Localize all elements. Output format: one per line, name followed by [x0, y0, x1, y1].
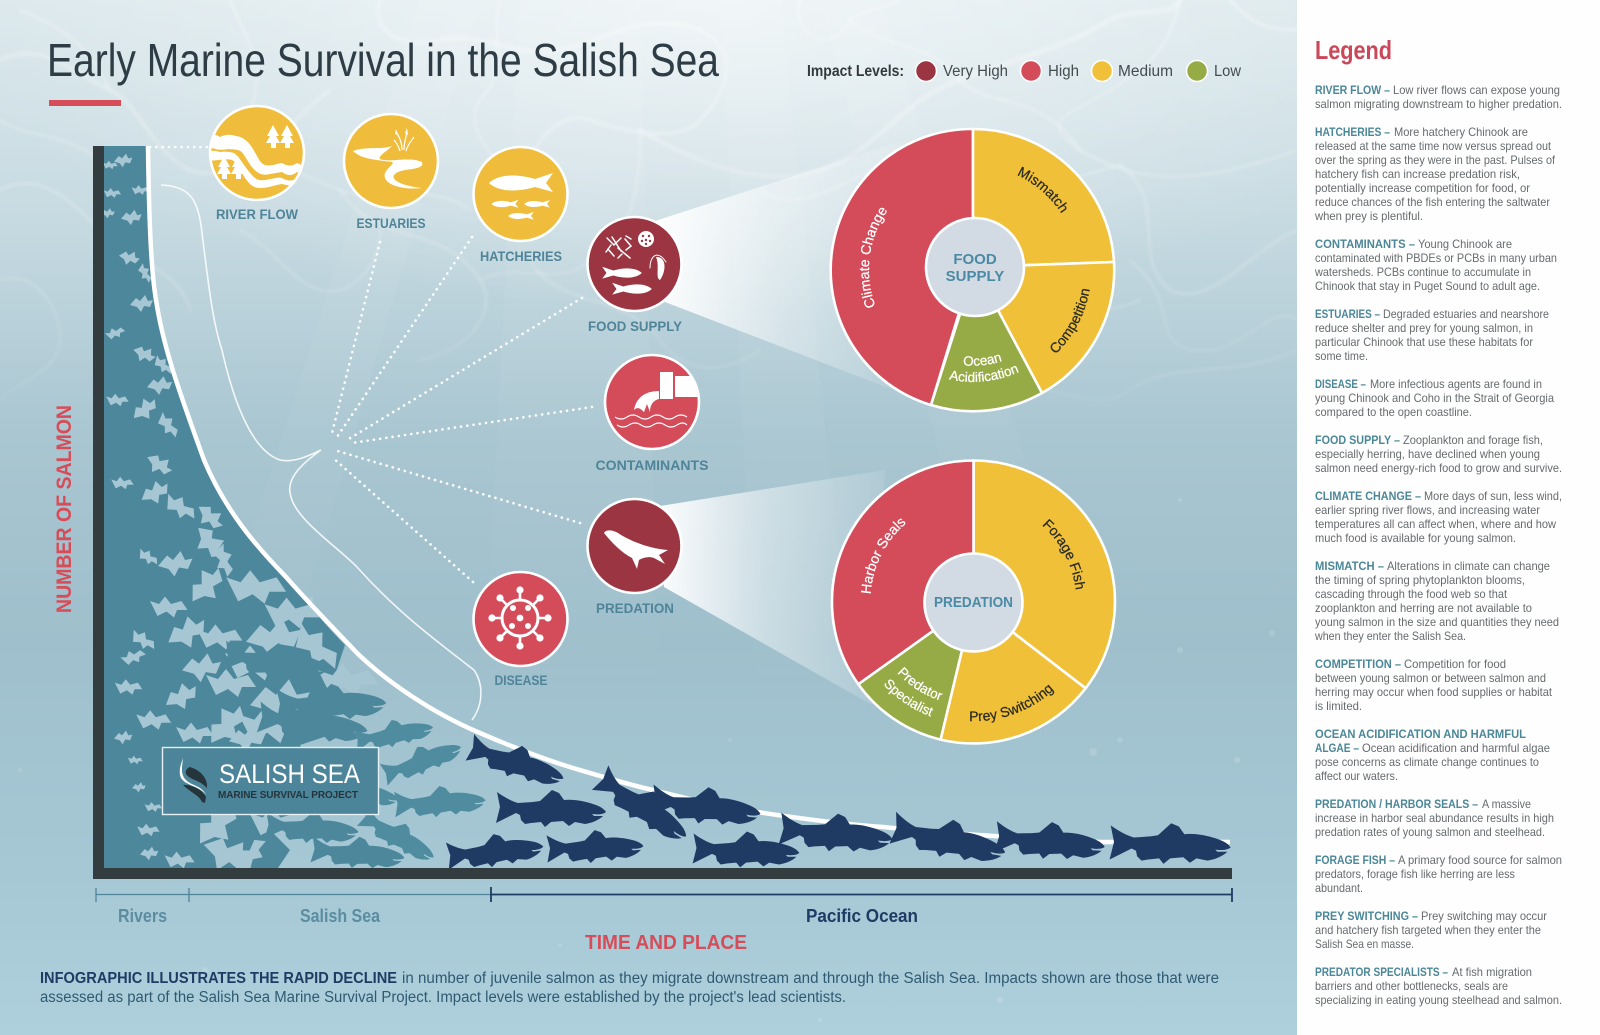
legend: forage fish: FORAGE FISH –	[1315, 853, 1395, 867]
label: predation: PREDATION	[596, 601, 674, 616]
legend: predation and harbor seals: predation rates of young salmon and steelhead.	[1315, 825, 1545, 839]
timeline scale	[96, 887, 1232, 926]
legend: predator specialists: At fish migration	[1452, 965, 1532, 979]
legend: predation and harbor seals: PREDATION / HARBOR SEALS –	[1315, 797, 1478, 811]
legend: prey switching: Salish Sea en masse.	[1315, 937, 1414, 951]
label: Salish Sea: Salish Sea	[300, 906, 381, 926]
label: hatcheries: HATCHERIES	[480, 249, 562, 264]
legend: contaminants: watersheds. PCBs continue to accumulate in	[1314, 265, 1531, 279]
logo: Salish Sea Marine Survival Project	[162, 748, 378, 814]
legend: mismatch: when they enter the Salish Sea.	[1314, 629, 1466, 643]
legend: contaminants: contaminated with PBDEs or PCBs in many urban	[1315, 251, 1557, 265]
legend: prey switching: Prey switching may occur	[1421, 909, 1547, 923]
wedge: ocean acidification	[931, 267, 1042, 411]
legend: estuaries: some time.	[1315, 349, 1368, 363]
key: low	[1186, 60, 1242, 82]
legend: contaminants: Young Chinook are	[1418, 237, 1512, 251]
light beam: food supply	[655, 140, 930, 404]
legend: mismatch: cascading through the food web so that	[1315, 587, 1508, 601]
label: competition: Competition	[1050, 288, 1090, 352]
legend: river flow	[1315, 83, 1562, 111]
label: prey switching: Prey Switching	[970, 684, 1054, 723]
legend: forage fish: abundant.	[1315, 881, 1363, 895]
label: disease: DISEASE	[494, 673, 548, 688]
legend: food supply: Zooplankton and forage fish,	[1403, 433, 1543, 447]
caption	[40, 970, 1219, 1006]
legend: food supply: salmon need energy-rich food to grow and survive.	[1315, 461, 1562, 475]
legend: hatcheries: potentially increase competition for food, or	[1315, 181, 1530, 195]
key: low: Low	[1214, 63, 1242, 80]
key: high: High	[1048, 63, 1079, 80]
impact levels key	[807, 60, 1242, 82]
legend: disease	[1315, 377, 1554, 419]
legend: food supply	[1315, 433, 1562, 475]
key heading: Impact Levels:	[807, 63, 904, 80]
Pacific Ocean range	[491, 887, 1232, 902]
label: contaminants: CONTAMINANTS	[596, 458, 708, 473]
legend: ocean acidification	[1315, 727, 1550, 783]
legend: ocean acidification: Ocean acidification and harmful algae	[1362, 741, 1550, 755]
hub label: food supply: FOOD	[953, 251, 997, 268]
legend: ocean acidification: OCEAN ACIDIFICATION AND HARMFUL	[1315, 727, 1526, 741]
predation hub	[924, 554, 1022, 652]
donut labels: food supply	[860, 166, 1090, 382]
legend: contaminants	[1314, 237, 1557, 293]
icon: contaminants	[605, 355, 699, 449]
legend: estuaries: ESTUARIES –	[1315, 307, 1380, 321]
legend: predation and harbor seals	[1315, 797, 1554, 839]
legend: river flow: salmon migrating downstream to higher predation.	[1315, 97, 1562, 111]
legend: hatcheries: reduce chances of the fish entering the saltwater	[1315, 195, 1550, 209]
label: specialist: Specialist	[884, 680, 934, 716]
legend: hatcheries: HATCHERIES –	[1315, 125, 1390, 139]
label: Pacific Ocean: Pacific Ocean	[806, 906, 918, 926]
legend: river flow: Low river flows can expose young	[1393, 83, 1560, 97]
legend: climate change: much food is available for young salmon.	[1315, 531, 1516, 545]
legend: ocean acidification: pose concerns as climate change continues to	[1315, 755, 1539, 769]
title: Early Marine Survival in the Salish Sea	[47, 34, 719, 86]
icon: disease virus	[474, 572, 568, 666]
legend: contaminants: Chinook that stay in Puget Sound to adult age.	[1315, 279, 1540, 293]
label: mismatch: Mismatch	[1018, 166, 1067, 214]
legend: predator specialists: PREDATOR SPECIALISTS –	[1315, 965, 1448, 979]
legend: competition: COMPETITION –	[1315, 657, 1401, 671]
key: very high	[916, 60, 1008, 82]
legend: climate change: temperatures all can affect when, where and how	[1315, 517, 1556, 531]
legend: hatcheries	[1314, 125, 1556, 223]
caption: in number of juvenile salmon as they migrate downstream and through the Salish Sea. Impacts shown are those that were	[402, 970, 1219, 987]
legend: climate change: CLIMATE CHANGE –	[1315, 489, 1421, 503]
y axis label: NUMBER OF SALMON	[53, 405, 76, 613]
logo wordmark: SALISH SEA	[219, 759, 360, 789]
key: high	[1020, 60, 1079, 82]
key: medium	[1092, 60, 1173, 82]
label: climate change: Climate Change	[860, 208, 887, 308]
hub label: predation: PREDATION	[934, 594, 1013, 611]
label: estuaries: ESTUARIES	[356, 216, 426, 231]
key: very high: Very High	[943, 63, 1008, 80]
legend: mismatch: Alterations in climate can change	[1387, 559, 1550, 573]
legend: climate change: earlier spring river flows, and increasing water	[1315, 503, 1540, 517]
caption: INFOGRAPHIC ILLUSTRATES THE RAPID DECLINE	[40, 970, 397, 987]
key: medium: Medium	[1118, 63, 1173, 80]
legend: predator specialists: barriers and other bottlenecks, seals are	[1315, 979, 1508, 993]
legend: climate change: More days of sun, less wind,	[1424, 489, 1562, 503]
legend: competition	[1315, 657, 1553, 713]
legend: ocean acidification: ALGAE –	[1315, 741, 1359, 755]
label: food supply: FOOD SUPPLY	[588, 319, 682, 334]
label: rivers: Rivers	[118, 906, 167, 926]
legend: hatcheries: More hatchery Chinook are	[1394, 125, 1528, 139]
legend: predation and harbor seals: increase in harbor seal abundance results in high	[1315, 811, 1554, 825]
logo mark	[180, 758, 207, 803]
food supply hub	[926, 218, 1024, 316]
label: predator: Predator	[898, 666, 943, 700]
legend: disease: compared to the open coastline.	[1315, 405, 1472, 419]
legend: predator specialists	[1315, 965, 1562, 1007]
legend: estuaries: particular Chinook that use these habitats for	[1315, 335, 1533, 349]
legend: food supply: FOOD SUPPLY –	[1315, 433, 1400, 447]
icon: hatcheries	[474, 147, 568, 241]
chart: salmon decline curve	[93, 146, 1232, 883]
label: harbor seals: Harbor Seals	[860, 518, 906, 594]
legend: competition: between young salmon or between salmon and	[1315, 671, 1546, 685]
legend: prey switching: and hatchery fish targeted when they enter the	[1315, 923, 1541, 937]
salmon mass under curve	[101, 146, 405, 883]
bracket line	[161, 185, 481, 720]
legend: competition: Competition for food	[1404, 657, 1506, 671]
legend: forage fish	[1315, 853, 1562, 895]
legend: food supply: especially herring, have declined when young	[1315, 447, 1540, 461]
panel: legend	[1297, 0, 1600, 1035]
legend: hatcheries: over the spring as they were in the past. Pulses of	[1315, 153, 1556, 167]
icon: estuaries	[344, 114, 438, 208]
legend: predation and harbor seals: A massive	[1482, 797, 1531, 811]
wedge: harbor seals	[832, 460, 974, 684]
legend heading: Legend	[1315, 35, 1392, 65]
legend: contaminants: CONTAMINANTS –	[1315, 237, 1415, 251]
label: ocean: Ocean	[964, 354, 1002, 366]
legend: disease: DISEASE –	[1315, 377, 1366, 391]
label: forage fish: Forage Fish	[1042, 518, 1086, 590]
donut chart: predation	[832, 460, 1115, 743]
legend: disease: More infectious agents are found in	[1370, 377, 1542, 391]
icon: predation seal	[588, 499, 682, 593]
icon: river flow	[205, 106, 312, 200]
hub label: food supply: SUPPLY	[946, 268, 1004, 285]
legend: forage fish: A primary food source for salmon	[1398, 853, 1562, 867]
axes	[93, 146, 1232, 879]
wedge: mismatch	[973, 129, 1114, 267]
wedge: prey switching	[941, 602, 1086, 743]
legend: mismatch: zooplankton and herring are not available to	[1315, 601, 1532, 615]
x axis label: TIME AND PLACE	[585, 932, 747, 954]
label: river flow: RIVER FLOW	[216, 207, 298, 222]
icon: food supply	[588, 217, 682, 311]
legend: estuaries: Degraded estuaries and nearshore	[1383, 307, 1549, 321]
legend: mismatch: MISMATCH –	[1315, 559, 1384, 573]
legend: prey switching: PREY SWITCHING –	[1315, 909, 1418, 923]
legend: estuaries: reduce shelter and prey for young salmon, in	[1315, 321, 1533, 335]
legend: ocean acidification: affect our waters.	[1315, 769, 1398, 783]
legend: competition: is limited.	[1315, 699, 1362, 713]
legend: hatcheries: released at the same time now versus spread out	[1315, 139, 1552, 153]
teal salmon mid-transition	[320, 712, 487, 867]
legend: estuaries	[1315, 307, 1549, 363]
wedge: forage fish	[974, 460, 1115, 688]
light beam: predation	[660, 470, 885, 705]
legend: hatcheries: when prey is plentiful.	[1314, 209, 1423, 223]
wedge: predator specialist	[858, 602, 974, 740]
logo tagline: MARINE SURVIVAL PROJECT	[218, 790, 358, 801]
legend: prey switching	[1315, 909, 1547, 951]
caption: assessed as part of the Salish Sea Marine Survival Project. Impact levels were established by the project's lead scientists.	[40, 989, 846, 1006]
wedge: climate change	[831, 129, 973, 405]
legend: climate change	[1315, 489, 1562, 545]
legend: river flow: RIVER FLOW –	[1315, 83, 1390, 97]
legend: mismatch	[1314, 559, 1559, 643]
legend: forage fish: predators, forage fish like herring are less	[1315, 867, 1515, 881]
donut chart: food supply	[831, 129, 1114, 411]
legend: mismatch: the timing of spring phytoplankton blooms,	[1315, 573, 1525, 587]
navy salmon in the ocean	[445, 732, 1231, 873]
legend: hatcheries: hatchery fish can increase predation risk,	[1315, 167, 1520, 181]
legend: competition: herring may occur when food supplies or habitat	[1315, 685, 1553, 699]
white decline curve	[148, 146, 1230, 842]
title accent bar	[49, 100, 121, 106]
legend: mismatch: young salmon in the size and quantities they need	[1315, 615, 1559, 629]
legend: predator specialists: specializing in eating young steelhead and salmon.	[1315, 993, 1562, 1007]
donut labels: predation	[860, 518, 1086, 723]
dotted connectors	[150, 147, 592, 582]
label: acidification: Acidification	[948, 366, 1019, 382]
rivers and Salish Sea range	[96, 888, 491, 902]
legend: disease: young Chinook and Coho in the Strait of Georgia	[1315, 391, 1554, 405]
wedge: competition	[975, 262, 1114, 393]
